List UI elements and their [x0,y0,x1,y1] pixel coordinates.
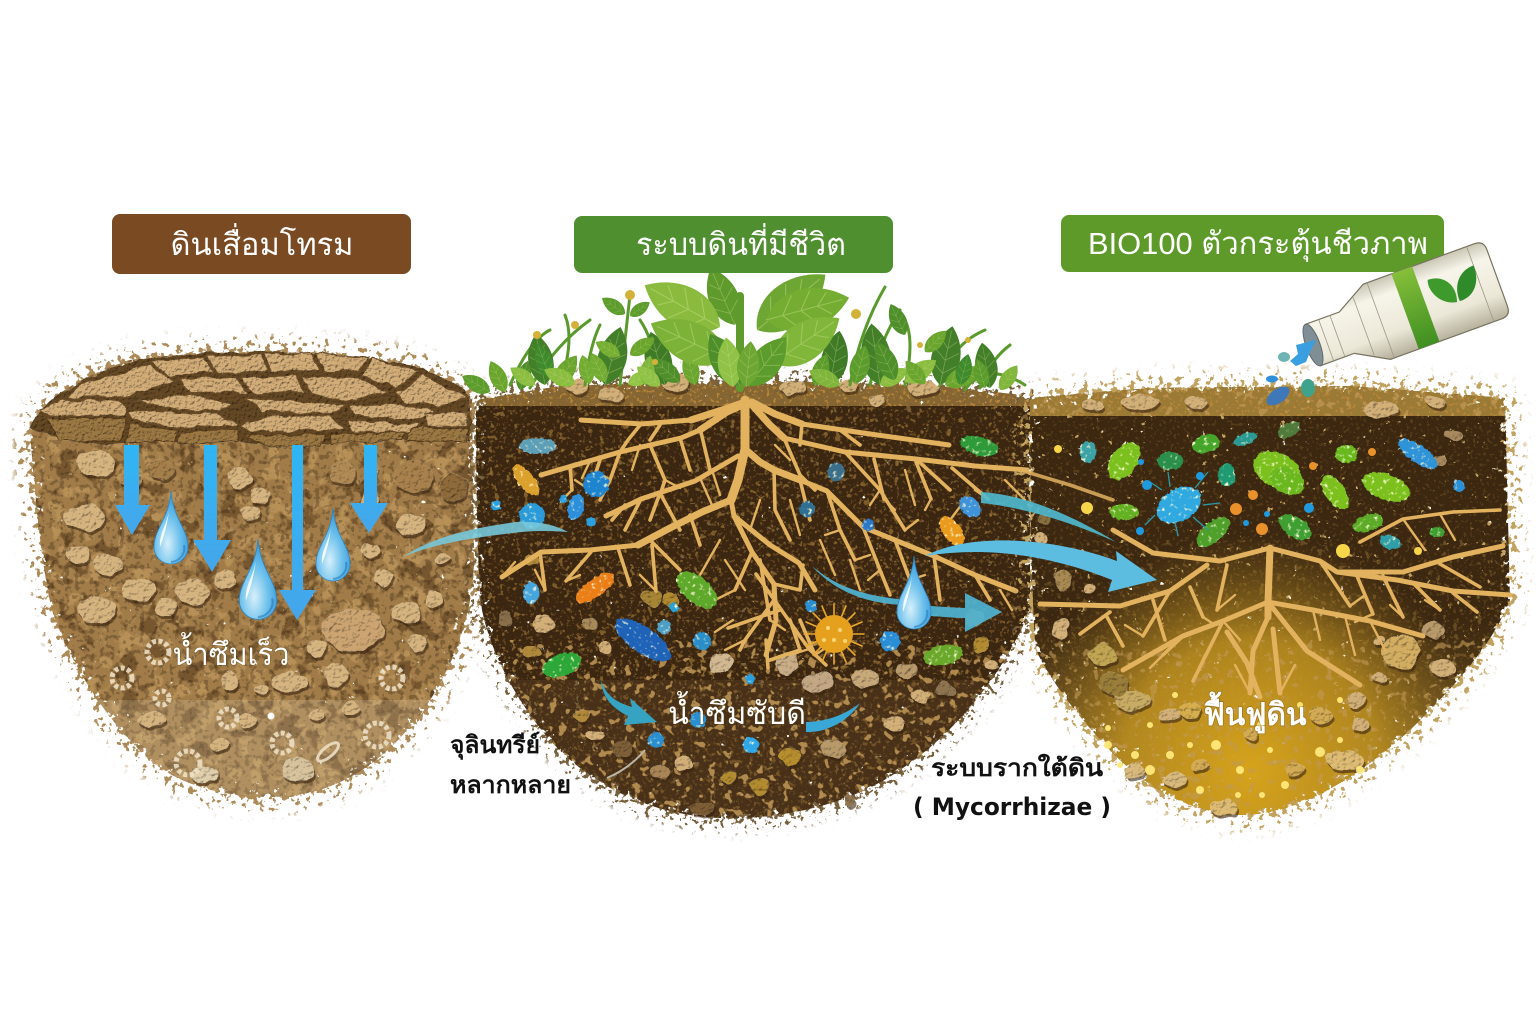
callout: mycorrhizae: ( Mycorrhizae ) [913,793,1111,821]
header: living soil system [574,216,893,273]
bottle pouring BIO100 [1263,240,1511,409]
panel: BIO100 restored soil [925,370,1530,830]
panel: degraded soil [0,330,490,810]
icon: spiky microbe [804,604,864,664]
roots [502,400,1027,668]
label: water seeps fast: น้ำซึมเร็ว [172,632,290,672]
grass blades [510,287,1025,390]
pebbles [1033,396,1461,816]
tiny coloured particles [1054,445,1422,798]
soil body [1030,386,1510,815]
label: restore soil: ฟื้นฟูดิน [1204,691,1306,734]
soil body [476,380,1030,818]
callout: diverse microbes: หลากหลาย [450,772,571,799]
icon: water drop [897,556,931,629]
callout: diverse microbes [450,731,645,799]
spikes on cyan microbe [1145,472,1220,536]
soil body texture [30,352,474,797]
header: degraded soil: ดินเสื่อมโทรม [170,223,354,262]
pebbles [498,374,999,815]
plant and grass [458,258,1025,399]
header: degraded soil [112,214,411,274]
roots [1020,470,1510,697]
microbes [1080,419,1465,553]
header: living soil system: ระบบดินที่มีชีวิต [636,223,846,262]
soil fray edge [1030,386,1510,815]
arrow: thin flow to roots [981,492,1116,542]
granules falling [1263,340,1316,409]
main plant [736,296,744,388]
arrow: curved lower left [601,680,657,725]
header: BIO100 [1061,215,1444,272]
cracked crust [28,352,470,448]
arrow: water inflow [403,522,568,557]
icon: downward water arrows [115,445,388,620]
arrow: water through roots [812,566,1002,632]
panel: living soil [403,258,1050,830]
icon: water drops [154,491,350,619]
callout: mycorrhizae: ระบบรากใต้ดิน [931,753,1104,782]
label: water absorbs well: น้ำซึมซับดี [668,691,806,731]
small yellow buds [533,290,971,365]
small plants [458,292,1023,399]
icon: leaf on bottle [1427,263,1483,309]
bottle body [1293,240,1511,385]
callout: diverse microbes: จุลินทรีย์ [450,731,540,761]
header: BIO100: BIO100 ตัวกระตุ้นชีวภาพ [1088,226,1428,263]
rings: microbe residues [112,641,403,775]
callout: mycorrhizae [913,753,1111,821]
arrow: main flow to roots [925,540,1157,592]
soil fray edge [30,352,474,797]
arrow: curved lower right [806,703,860,732]
stones [64,450,468,784]
microbes [491,432,1001,753]
soil fray edge [476,380,1030,818]
